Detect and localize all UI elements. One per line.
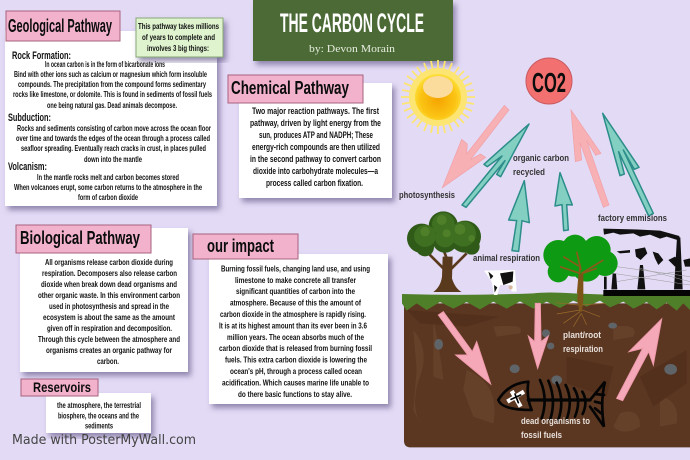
arrow: decomposition center xyxy=(528,303,548,368)
labels: process names: photosynthesis xyxy=(399,190,455,200)
labels: process names: animal respiration xyxy=(473,253,540,263)
note: three big things: of years to complete and xyxy=(142,32,215,42)
text block: biological description: ecosystem is about the same as the amount xyxy=(43,312,175,322)
text block: rock formation: Rock Formation: xyxy=(12,50,71,62)
title banner xyxy=(253,0,453,61)
arrow: pink to CO2 xyxy=(571,110,609,207)
text block: subduction: over time and towards the edges of the ocean through a process called xyxy=(16,133,210,143)
text block: rock formation: In ocean carbon is in the form of bicarbonate ions xyxy=(45,59,165,69)
text block: impact description: ocean's pH, through a process called ocean xyxy=(230,366,362,376)
arrow: animal respiration xyxy=(509,181,529,251)
panel: biological pathway xyxy=(16,225,188,372)
arrow: photosynthesis xyxy=(442,105,509,188)
labels: process names: respiration xyxy=(563,344,603,354)
labels: process names: recycled xyxy=(513,167,545,177)
heading: our impact: our impact xyxy=(207,236,274,256)
text block: reservoirs list: sediments xyxy=(85,420,113,430)
arrows: atmosphere exchange xyxy=(442,105,653,251)
panel: our impact xyxy=(193,234,388,404)
heading: our impact xyxy=(193,234,298,259)
text block: biological description: given off in respiration and decomposition. xyxy=(47,323,172,333)
arrow: plant respiration xyxy=(555,173,572,231)
icon: green tree xyxy=(543,235,618,327)
text block: reservoirs list: the atmosphere, the terrestrial xyxy=(57,400,141,410)
text block: chemical description: process called carbon fixation. xyxy=(266,178,363,188)
soil xyxy=(404,303,690,447)
labels: process names: fossil fuels xyxy=(521,430,562,440)
text block: biological description xyxy=(38,257,180,366)
text block: volcanism: In the mantle rocks melt and carbon becomes stored xyxy=(37,172,179,182)
heading: geological pathway: Geological Pathway xyxy=(8,16,112,36)
note: three big things xyxy=(136,18,223,57)
note: three big things: This pathway takes millions xyxy=(138,21,219,31)
text block: biological description: Through this cycle between the atmosphere and xyxy=(38,334,180,344)
text block: rock formation: compounds. The precipitation from the compound forms sedimentary xyxy=(18,79,206,89)
arrow: organic carbon recycled left xyxy=(462,124,529,207)
note: three big things: involves 3 big things: xyxy=(147,43,209,53)
text block: biological description: other organic waste. In this environment carbon xyxy=(38,290,180,300)
text block: biological description: All organisms release carbon dioxide during xyxy=(45,257,173,267)
text block: rock formation: Bind with other ions such as calcium or magnesium which form insoluble xyxy=(14,69,207,79)
text block: biological description: used in photosynthesis and spread in the xyxy=(49,301,169,311)
author: by: Devon Morain xyxy=(309,43,396,55)
text block: impact description: do there basic functions to stay alive. xyxy=(238,389,352,399)
heading: biological pathway: Biological Pathway xyxy=(20,228,140,248)
text block: chemical description xyxy=(250,106,381,188)
text block: biological description: dioxide when break down dead organisms and xyxy=(41,279,177,289)
heading: chemical pathway: Chemical Pathway xyxy=(231,78,349,98)
heading: biological pathway xyxy=(16,225,151,253)
arrow: decomposition left xyxy=(438,312,491,384)
text block: impact description: It is at its highest amount than its ever been in 3.6 xyxy=(219,320,367,330)
text block: impact description: limestone to make concrete all transfer xyxy=(235,275,357,285)
text block: impact description: carbon dioxide that is released from burning fossil xyxy=(219,343,372,353)
icon: fish skeleton xyxy=(498,380,605,427)
text block: chemical description: in the second pathway to convert carbon xyxy=(250,154,381,164)
text block: chemical description: sun, produces ATP and NADPH; These xyxy=(259,130,373,140)
text block: rock formation xyxy=(12,50,212,110)
text block: volcanism: form of carbon dioxide xyxy=(78,192,138,202)
icon: sun xyxy=(401,60,475,134)
labels: process names: organic carbon xyxy=(513,153,569,163)
text block: impact description: acidification. Which causes marine life unable to xyxy=(222,378,369,388)
text block: impact description xyxy=(219,264,372,399)
grass xyxy=(402,292,690,311)
text block: rock formation: one being natural gas. Dead animals decompose. xyxy=(47,100,177,110)
icon: CO2 circle: CO2 xyxy=(532,67,566,98)
text block: impact description: fuels. This extra carbon dioxide is lowering the xyxy=(225,354,367,364)
text block: impact description: atmosphere. Because of this the amount of xyxy=(230,298,361,308)
text block: subduction: Subduction: xyxy=(8,112,51,124)
text block: biological description: respiration. Decomposers also release carbon xyxy=(42,268,177,278)
text block: subduction xyxy=(8,112,211,164)
title: THE CARBON CYCLE xyxy=(280,8,424,38)
text block: impact description: million years. The ocean absorbs much of the xyxy=(227,332,364,342)
icon: cow xyxy=(484,270,517,295)
heading: geological pathway xyxy=(6,11,120,41)
text block: subduction: Rocks and sediments consisting of carbon move across the ocean floor xyxy=(17,123,211,133)
arrow: factory emissions xyxy=(603,113,653,216)
text block: biological description: carbon. xyxy=(97,356,119,366)
text block: chemical description: pathway, driven by light energy from the xyxy=(250,118,381,128)
arrow: fossil fuel emissions xyxy=(617,319,662,401)
text block: chemical description: energy-rich compounds are then utilized xyxy=(252,142,380,152)
text block: volcanism: Volcanism: xyxy=(8,161,47,173)
scene: ground and organisms xyxy=(402,211,690,447)
icon: factory xyxy=(603,229,690,296)
rocks xyxy=(434,323,677,385)
text block: impact description: Burning fossil fuels, changing land use, and using xyxy=(221,264,370,274)
labels: process names: factory emmisions xyxy=(598,213,667,223)
labels: process names: dead organisms to xyxy=(521,416,590,426)
panel: reservoirs xyxy=(21,379,151,433)
text block: rock formation: rocks like limestone, or dolomite. This is found in sediments of fossil fuels xyxy=(13,89,212,99)
text block: volcanism: When volcanoes erupt, some carbon returns to the atmosphere in the xyxy=(14,182,202,192)
text block: chemical description: Two major reaction pathways. The first xyxy=(252,106,379,116)
text block: impact description: significant quantities of carbon into the xyxy=(236,286,355,296)
text block: reservoirs list xyxy=(57,400,141,430)
text block: subduction: seafloor spreading. Eventually reach cracks in crust, in places pulled xyxy=(21,143,206,153)
icon: large tree xyxy=(407,211,481,292)
text block: reservoirs list: biosphere, the oceans and the xyxy=(58,410,139,420)
icon: CO2 circle xyxy=(526,58,572,104)
text block: subduction: down into the mantle xyxy=(84,154,142,164)
text block: impact description: carbon dioxide in the atmosphere is rapidly rising. xyxy=(220,309,366,319)
text block: volcanism xyxy=(8,161,202,202)
labels: process names xyxy=(399,153,667,440)
labels: process names: plant/root xyxy=(563,330,601,340)
text block: chemical description: dioxide into carbohydrate molecules—a xyxy=(253,166,378,176)
panel: geological pathway xyxy=(5,11,223,206)
heading: chemical pathway xyxy=(228,75,363,103)
text block: biological description: organisms creates an organic pathway for xyxy=(46,345,173,355)
panel: chemical pathway xyxy=(228,75,392,198)
watermark: Made with PosterMyWall.com xyxy=(12,433,196,448)
heading: reservoirs: Reservoirs xyxy=(33,379,91,395)
